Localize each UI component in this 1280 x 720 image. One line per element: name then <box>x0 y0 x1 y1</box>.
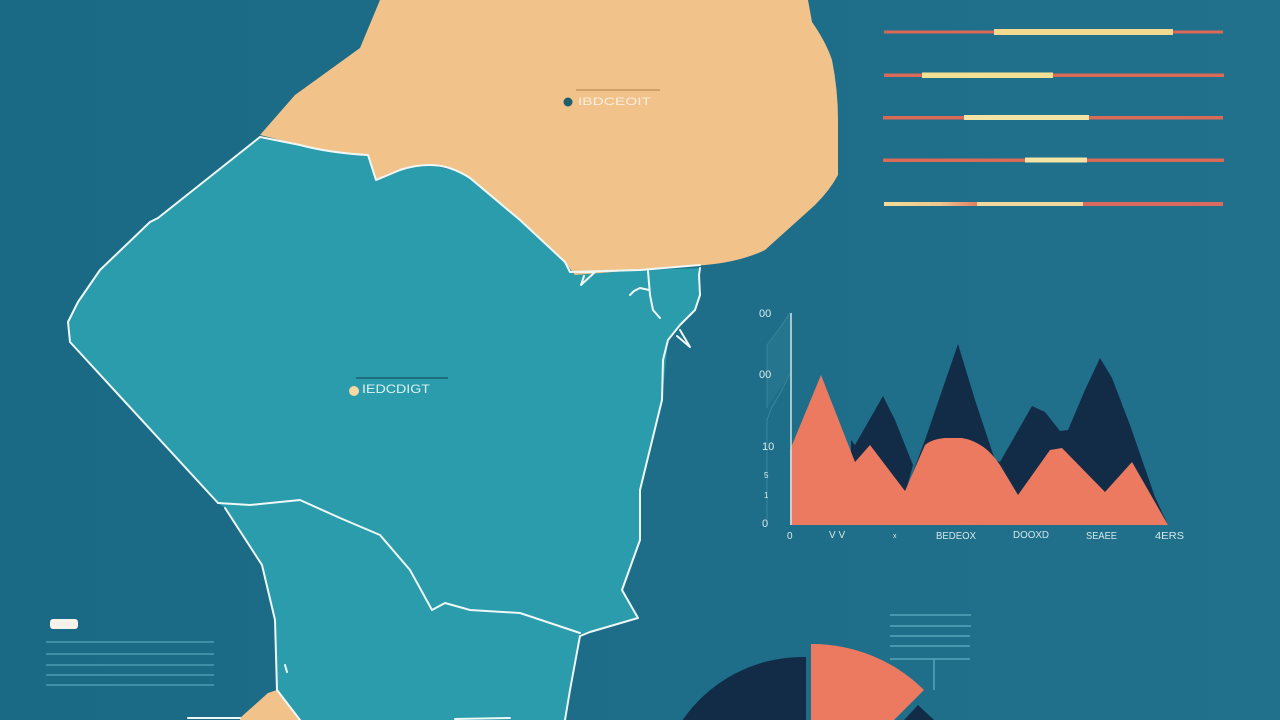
y axis labels <box>759 308 774 530</box>
region: peach south <box>240 690 300 720</box>
label: teal region: IEDCDIGT <box>362 382 431 396</box>
x axis labels: 0 <box>787 531 793 542</box>
bar row 4 <box>883 158 1224 162</box>
x axis labels: x <box>893 533 897 540</box>
y axis labels: 0 <box>762 518 768 530</box>
region: peach north <box>260 0 838 275</box>
pie legend lines <box>890 615 971 690</box>
bar row 2 <box>884 72 1224 78</box>
range bars <box>883 29 1224 206</box>
pie chart <box>680 644 934 720</box>
y axis labels: 10 <box>762 441 774 453</box>
label: peach region: IBDCEOIT <box>578 96 651 108</box>
y axis <box>790 313 792 525</box>
navy series <box>851 344 1168 525</box>
x axis labels <box>787 530 1184 542</box>
bar row 1 <box>884 29 1223 35</box>
note pill <box>50 619 78 629</box>
navy small slice <box>904 705 934 720</box>
coral slice <box>811 644 924 720</box>
x axis labels: V V <box>829 530 845 541</box>
map: regions <box>68 0 838 720</box>
region: teal main <box>68 138 700 720</box>
label: peach region <box>564 90 660 108</box>
bar row 3 <box>883 115 1223 120</box>
bottom-left note <box>46 619 214 685</box>
note lines <box>46 642 214 685</box>
y axis labels: 00 <box>759 308 771 320</box>
x axis labels: BEDEOX <box>936 531 976 542</box>
x axis labels: DOOXD <box>1013 530 1049 541</box>
x axis labels: SEAEE <box>1086 531 1117 542</box>
navy slice <box>680 657 806 720</box>
area chart <box>759 308 1184 542</box>
y axis labels: 00 <box>759 369 771 381</box>
y axis labels: 5 <box>764 471 769 480</box>
coral series <box>790 375 1168 525</box>
bar row 5 <box>884 202 1223 206</box>
region borders <box>68 137 700 720</box>
label: teal region <box>349 378 448 396</box>
x axis labels: 4ERS <box>1155 531 1184 542</box>
y axis labels: 1 <box>764 491 769 500</box>
faint axis curves <box>767 313 790 522</box>
